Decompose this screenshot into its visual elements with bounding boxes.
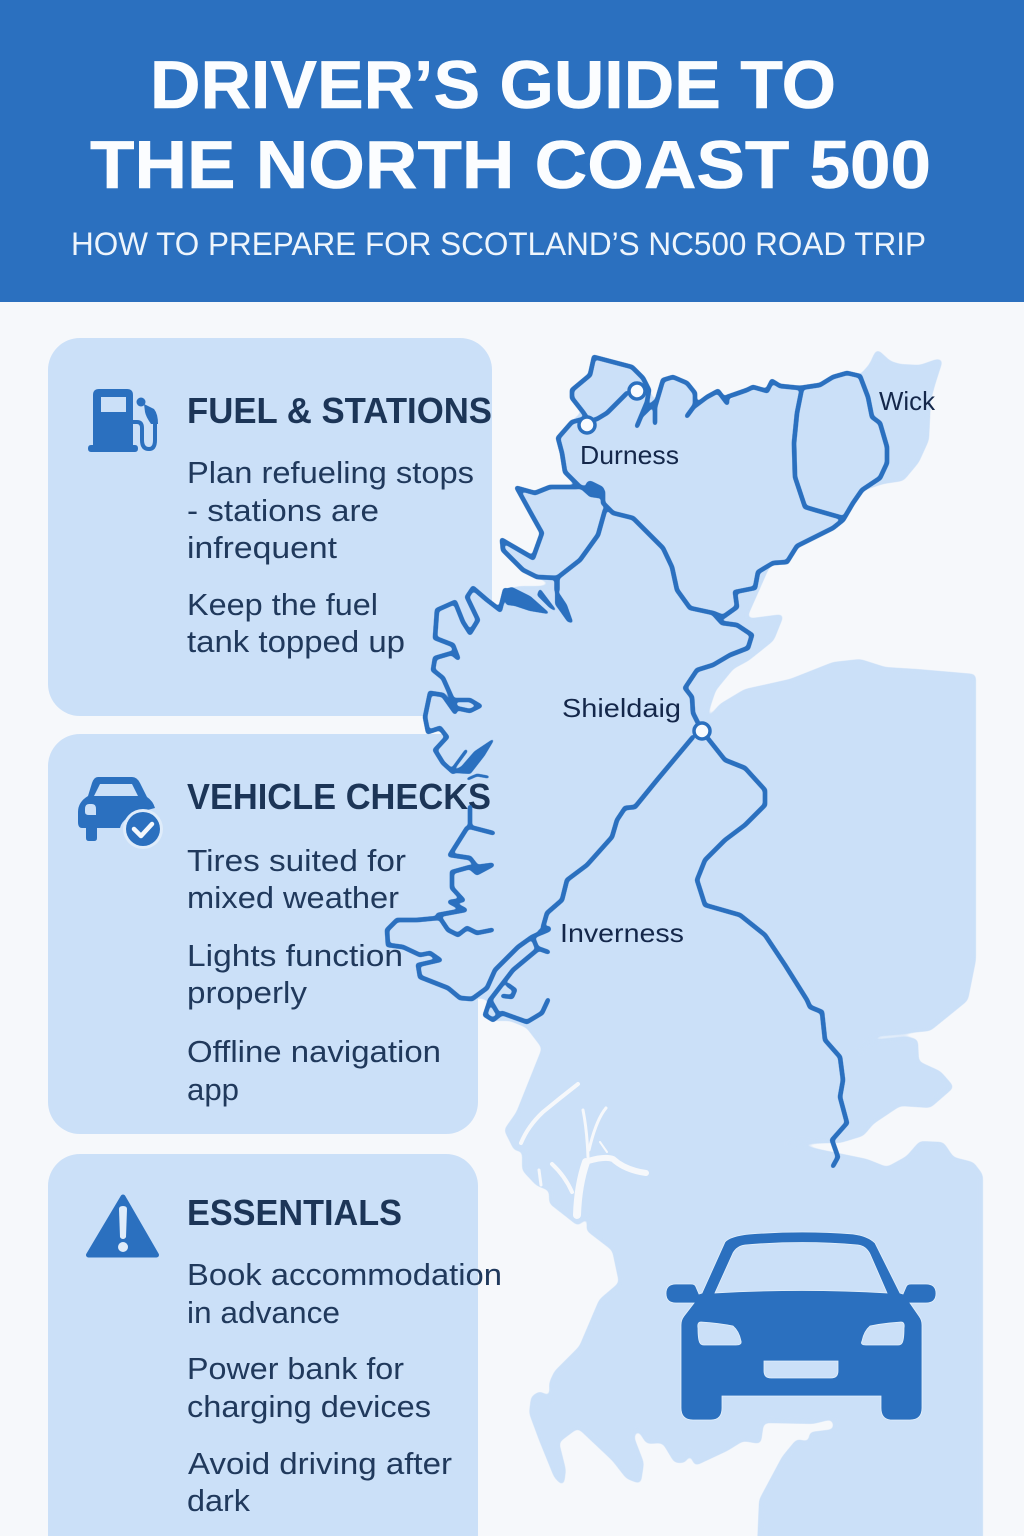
text: accommodation: in advance [187,1295,340,1330]
panel: fuel and stations [48,338,492,716]
heading: essentials: ESSENTIALS [187,1192,402,1233]
subtitle: HOW TO PREPARE FOR SCOTLAND’S NC500 ROAD TRIP [71,226,926,262]
icon: large car front view [666,1232,936,1420]
filled sea-loch clusters [453,487,604,773]
text: navigation: Offline navigation [187,1034,441,1069]
text: fuel tank [187,587,405,659]
text: power bank: Power bank for [187,1351,404,1386]
icon: warning triangle [88,1197,156,1255]
header banner [0,0,1024,302]
text: tires: Tires suited for [187,843,406,878]
map marker: Shieldaig [694,723,710,739]
text: navigation: app [187,1072,239,1107]
map label: Shieldaig: Shieldaig [562,693,681,723]
map: land of northern Scotland [387,350,982,1536]
heading: vehicle checks: VEHICLE CHECKS [187,776,491,817]
map marker: Durness [579,417,595,433]
map label: Inverness: Inverness [560,918,684,948]
panel: vehicle checks [48,734,491,1134]
text: lights: Lights function [187,938,403,973]
icon: car with check mark [78,777,163,849]
text: fuel tank: Keep the fuel [187,587,378,622]
title: THE NORTH COAST 500 [90,127,931,203]
text: power bank [187,1351,431,1424]
heading: fuel and stations: FUEL & STATIONS [187,390,492,431]
text: driving after dark: Avoid driving after [188,1446,452,1481]
panel: essentials [48,1154,502,1536]
text: tires: mixed weather [187,880,399,915]
text: driving after dark: dark [187,1483,251,1518]
text: lights: properly [187,975,308,1010]
text: fuel tank: tank topped up [187,624,405,659]
text: power bank: charging devices [187,1389,431,1424]
sea lochs [521,1084,646,1215]
text: refueling stops: - stations are [187,493,379,528]
map label: Wick: Wick [879,386,936,416]
text: refueling stops: Plan refueling stops [187,455,474,490]
text: driving after dark [187,1446,452,1518]
title: DRIVER’S GUIDE TO [150,47,836,123]
icon: fuel pump [88,389,158,452]
text: navigation [187,1034,441,1107]
text: accommodation [187,1257,502,1330]
text: tires [187,843,406,915]
text: accommodation: Book accommodation [187,1257,502,1292]
text: refueling stops [187,455,474,565]
title [90,47,931,203]
map label: Durness: Durness [580,440,679,470]
map: NC500 route lines [387,357,887,1166]
text: lights [187,938,403,1010]
text: refueling stops: infrequent [187,530,337,565]
map marker: north coast stop [629,383,645,399]
